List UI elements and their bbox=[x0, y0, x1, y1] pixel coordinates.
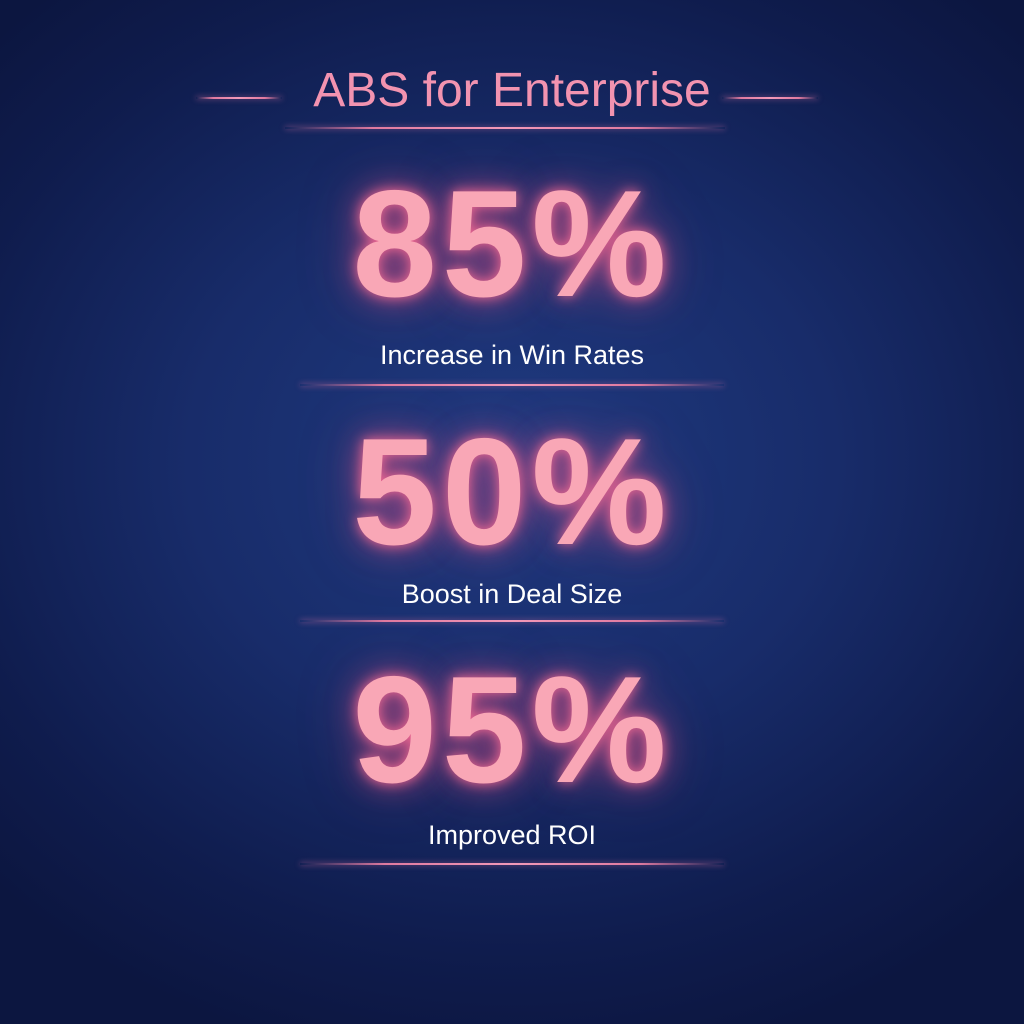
divider 2 bbox=[300, 620, 724, 622]
title line left bbox=[196, 97, 282, 99]
divider 3 bbox=[300, 863, 724, 865]
title line right bbox=[722, 97, 818, 99]
title: ABS for Enterprise bbox=[313, 64, 711, 117]
divider 1 bbox=[300, 384, 724, 386]
title underline bbox=[285, 127, 725, 129]
label: ROI: Improved ROI bbox=[428, 820, 596, 850]
label: win rates: Increase in Win Rates bbox=[380, 340, 644, 370]
stat: 95%: 95% bbox=[352, 645, 672, 815]
stat: 85%: 85% bbox=[352, 159, 672, 329]
label: deal size: Boost in Deal Size bbox=[402, 579, 622, 609]
stat: 50%: 50% bbox=[352, 407, 672, 577]
